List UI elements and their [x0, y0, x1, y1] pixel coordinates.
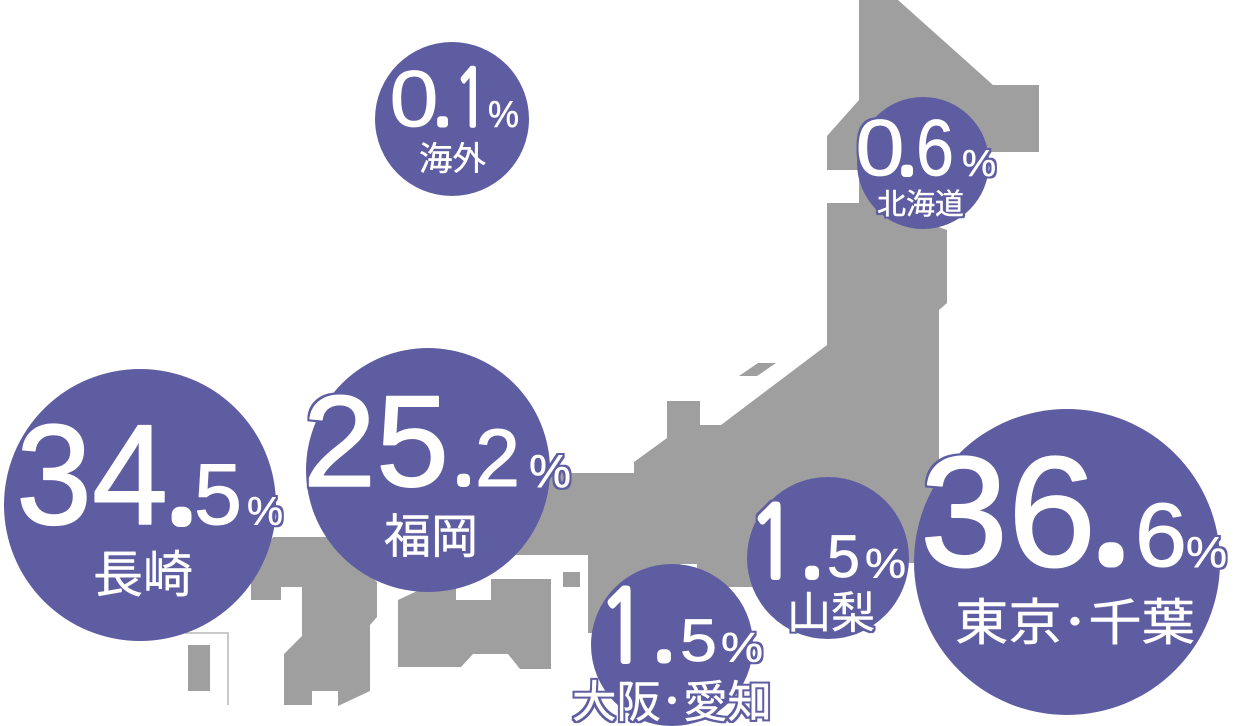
- bubble: overseas: [375, 42, 529, 196]
- bubble: Fukuoka: %: [529, 445, 571, 497]
- bubble: Nagasaki: 長崎: [93, 547, 193, 603]
- map: Hokkaido: [827, 0, 1039, 213]
- bubble: overseas: 0: [390, 54, 438, 143]
- bubble: Fukuoka: 2: [475, 413, 520, 504]
- bubble: Osaka and Aichi: [572, 564, 772, 726]
- bubble: Nagasaki: .: [176, 484, 187, 528]
- bubble: Tokyo and Chiba: 36: [920, 425, 1096, 600]
- bubble: Osaka and Aichi: 1: [598, 578, 648, 676]
- map: Shikoku: [398, 579, 551, 669]
- map of Japan: [188, 0, 1039, 706]
- bubble: Hokkaido: 北海道: [877, 188, 964, 221]
- map: Honshu: [513, 203, 947, 633]
- bubble: Yamanashi: 1: [748, 494, 798, 592]
- bubble: Hokkaido: .: [901, 138, 913, 182]
- bubble: Tokyo and Chiba: [914, 409, 1227, 715]
- map: Sado island: [739, 363, 776, 376]
- bubble: Tokyo and Chiba: 6: [1135, 486, 1187, 586]
- bubble: Hokkaido: 6: [916, 103, 954, 192]
- bubble: Osaka and Aichi: .: [658, 624, 670, 668]
- bubble: Yamanashi: .: [806, 540, 818, 584]
- bubble: Fukuoka: .: [458, 448, 469, 492]
- bubble: Yamanashi: 5: [827, 523, 860, 590]
- Okinawa inset frame: [185, 633, 228, 705]
- bubble: Nagasaki: [4, 369, 283, 641]
- bubble: Fukuoka: [303, 348, 571, 592]
- bubble: Nagasaki: 34: [16, 396, 168, 555]
- bubble: Hokkaido: [856, 97, 996, 229]
- bubble: Tokyo and Chiba: %: [1186, 528, 1227, 577]
- bubble: overseas: 海外: [419, 140, 486, 177]
- bubble: Nagasaki: %: [247, 490, 283, 534]
- bubble: Hokkaido: %: [962, 143, 996, 184]
- bubble: Nagasaki: 5: [194, 447, 242, 543]
- bubble: Tokyo and Chiba: 東京･千葉: [955, 595, 1195, 651]
- bubble: Yamanashi: [747, 477, 909, 639]
- map: Kyushu: [251, 537, 377, 706]
- bubble: Fukuoka: 福岡: [384, 510, 478, 563]
- map: Okinawa: [188, 645, 210, 691]
- bubble: overseas: 1: [454, 60, 488, 138]
- bubble: Yamanashi: %: [865, 540, 906, 587]
- bubble: Osaka and Aichi: 5: [680, 607, 717, 674]
- bubble: overseas: .: [437, 89, 448, 133]
- map: Awaji island: [563, 572, 580, 587]
- bubble: Osaka and Aichi: %: [721, 624, 763, 671]
- bubble: Osaka and Aichi: 大阪･愛知: [572, 678, 772, 726]
- bubble: Fukuoka: 25: [303, 368, 449, 514]
- bubble: Yamanashi: 山梨: [787, 589, 875, 638]
- bubble: Tokyo and Chiba: .: [1105, 522, 1117, 566]
- bubble: Hokkaido: 0: [856, 103, 904, 192]
- bubble: overseas: %: [488, 94, 519, 135]
